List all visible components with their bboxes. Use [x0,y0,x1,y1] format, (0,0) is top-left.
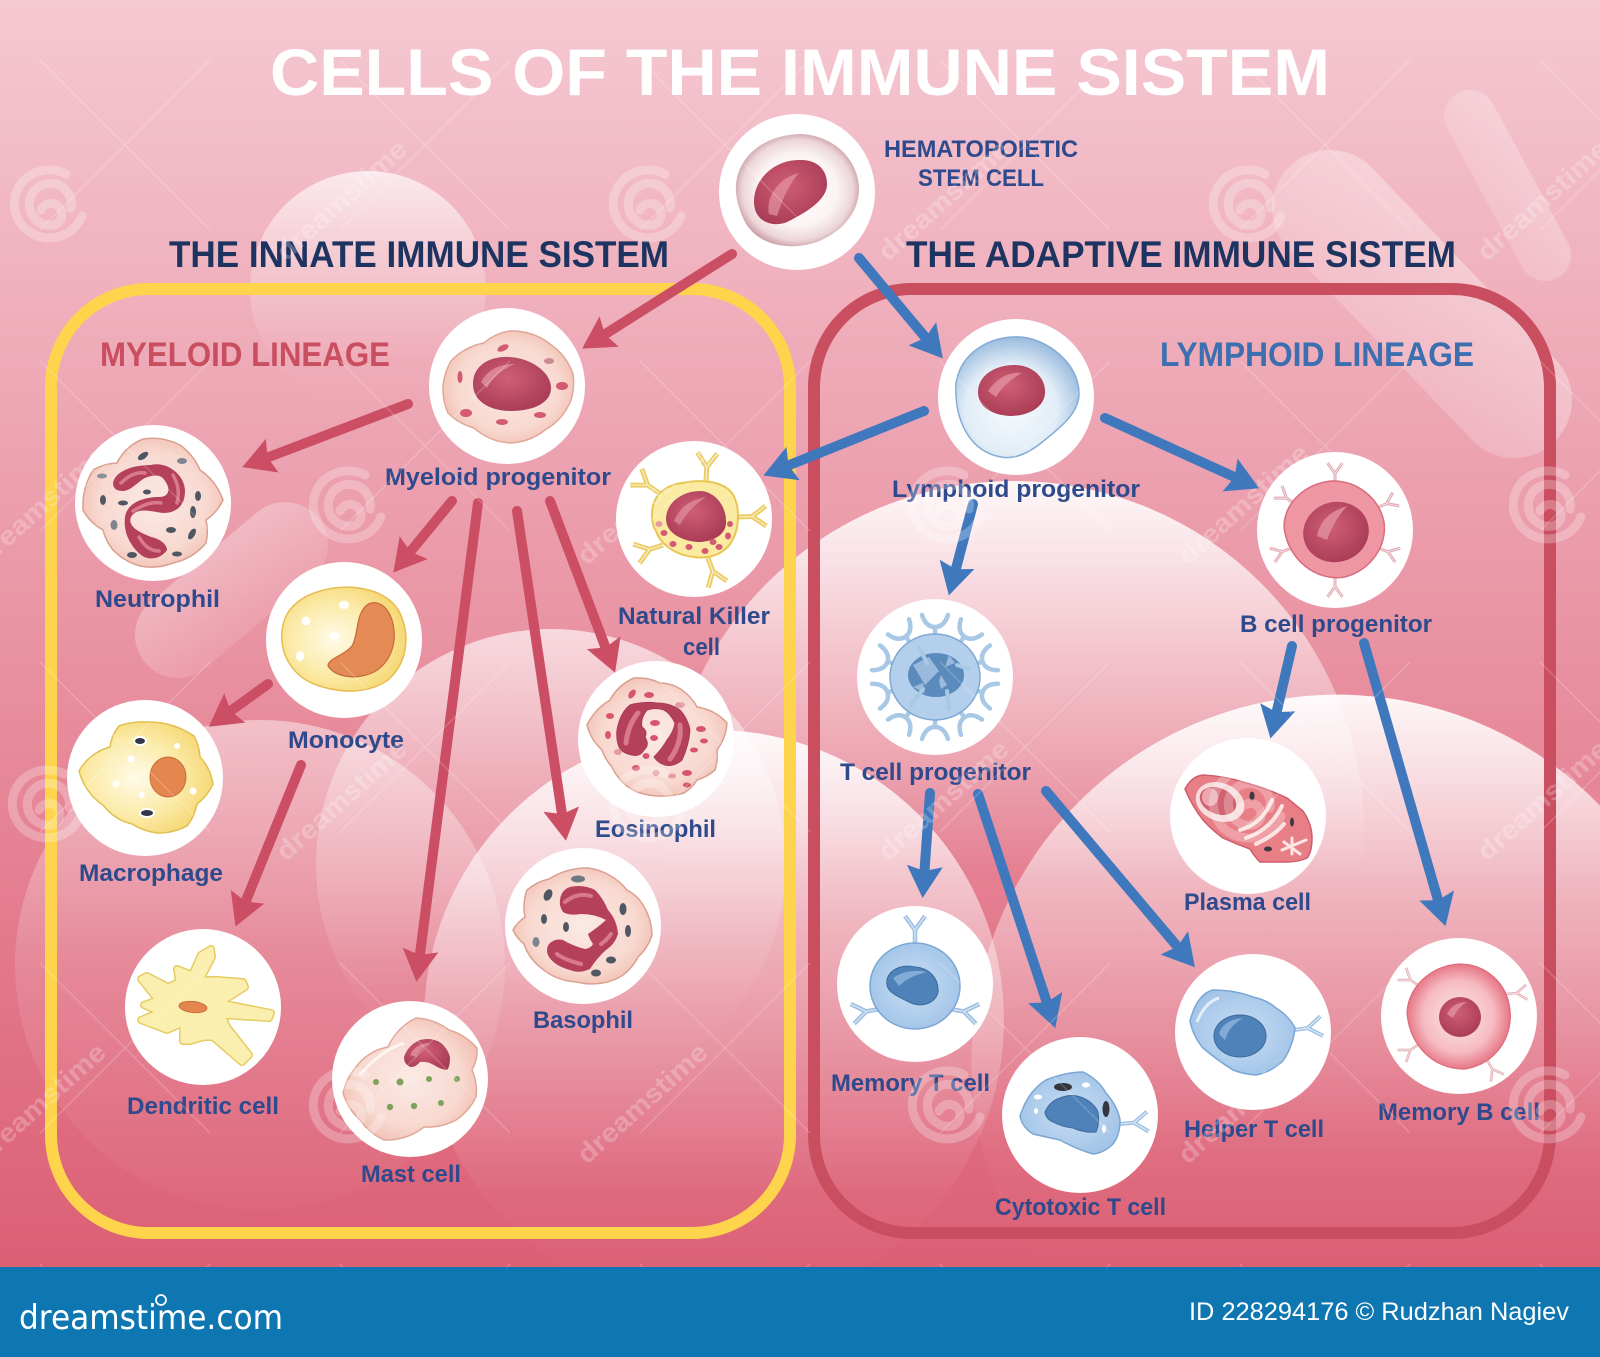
node: macrophage [67,700,223,887]
arrow: myeloid to eosinophil [550,501,608,654]
label: Macrophage [79,860,223,887]
label [884,136,1078,192]
icon: memory T cell [837,906,993,1062]
icon: natural killer cell [616,441,772,597]
heading: adaptive: THE ADAPTIVE IMMUNE SISTEM [906,234,1456,275]
node: monocyte [266,562,422,754]
node: natural killer cell [616,441,772,661]
arrow: monocyte to macrophage [225,684,268,715]
label: Helper T cell [1184,1116,1324,1143]
node: cytotoxic T cell [995,1037,1166,1221]
label [618,603,770,661]
icon: myeloid progenitor cell [429,308,585,464]
watermark: dreamstime [270,734,413,866]
label: Plasma cell [1184,889,1311,916]
label: Dendritic cell [127,1093,279,1120]
icon: macrophage cell [67,700,223,856]
watermark: dreamstime [872,134,1015,266]
label: Memory T cell [831,1070,990,1097]
watermark: dreamstime [571,438,714,570]
icon: plasma cell [1170,738,1326,894]
node: lymphoid progenitor [892,319,1140,503]
label: T cell progenitor [840,759,1031,786]
node: mast cell [332,1001,488,1188]
footer bar [0,1267,1600,1357]
node: plasma cell [1170,738,1326,916]
arrow: B to memory B [1364,643,1440,907]
arrow: T to cytotoxic [978,794,1049,1009]
node: eosinophil [578,661,734,843]
label: B cell progenitor [1240,611,1432,638]
panel: innate immune system frame [51,289,790,1233]
icon: eosinophil cell [578,661,734,817]
title: CELLS OF THE IMMUNE SISTEM [270,35,1330,109]
arrow: T to helper [1046,791,1182,952]
node: basophil [505,848,661,1034]
icon: monocyte cell [266,562,422,718]
footer: image id and credit: ID 228294176 © Rudzhan Nagiev [1189,1298,1570,1326]
arrow: lymphoid to T progenitor [954,504,973,576]
arrow: B to plasma [1275,646,1292,719]
icon: B cell progenitor [1257,452,1413,608]
arrow: stem to myeloid [599,254,732,338]
label: Monocyte [288,727,404,754]
arrow: myeloid to basophil [517,511,563,821]
watermark: dreamstime [1172,1037,1315,1169]
icon: basophil cell [505,848,661,1004]
label: Mast cell [361,1161,461,1188]
icon: dendritic cell [125,929,281,1085]
panel: adaptive immune system frame [814,289,1550,1233]
icon: neutrophil cell [75,425,231,581]
label: Basophil [533,1007,633,1034]
arrow: T to memory T [924,793,930,878]
arrows: lymphoid (blue) [782,258,1440,1009]
watermark: dreamstime [270,134,413,266]
arrow: myeloid to neutrophil [261,404,408,460]
label: HEMATOPOIETIC [884,136,1078,163]
arrows: myeloid (red) [225,254,732,962]
node: dendritic cell [125,929,281,1120]
heading: myeloid lineage: MYELOID LINEAGE [100,336,390,374]
icon: T cell progenitor [857,599,1013,755]
node: helper T cell [1175,954,1331,1143]
node: memory B cell [1378,938,1540,1126]
footer: dreamstime logo: dreamstime.com [19,1298,283,1338]
label: Cytotoxic T cell [995,1194,1166,1221]
arrow: myeloid to monocyte [406,501,452,557]
label: Lymphoid progenitor [892,476,1140,503]
label: cell [683,634,720,661]
heading: lymphoid lineage: LYMPHOID LINEAGE [1160,336,1474,374]
arrow: stem to lymphoid [859,258,930,343]
node: memory T cell [831,906,993,1097]
node: myeloid progenitor [385,308,611,491]
icon: memory B cell [1381,938,1537,1094]
arrow: myeloid to mast cell [419,503,478,962]
icon: cytotoxic T cell [1002,1037,1158,1193]
label: Eosinophil [595,816,716,843]
label: Natural Killer [618,603,770,630]
label: Neutrophil [95,586,220,613]
watermark: dreamstime [1471,134,1600,266]
label: Memory B cell [1378,1099,1540,1126]
icon: lymphoid progenitor cell [938,319,1094,475]
node: T cell progenitor [840,599,1031,786]
arrow: monocyte to dendritic [243,765,301,908]
watermark: dreamstime [1172,438,1315,570]
arrow: lymphoid to B progenitor [1105,418,1241,480]
icon: helper T cell [1175,954,1331,1110]
arrow: lymphoid to natural killer [782,411,924,468]
node: B cell progenitor [1240,452,1432,638]
label: STEM CELL [918,165,1044,192]
watermark: dreamstime [872,734,1015,866]
node: neutrophil [75,425,231,613]
heading: innate: THE INNATE IMMUNE SISTEM [169,234,669,275]
watermark: dreamstime [571,1037,714,1169]
icon: stem cell [719,114,875,270]
icon: mast cell [332,1001,488,1157]
node: hematopoietic stem cell [719,114,1078,270]
label: Myeloid progenitor [385,464,611,491]
watermark: dreamstime [1471,734,1600,866]
